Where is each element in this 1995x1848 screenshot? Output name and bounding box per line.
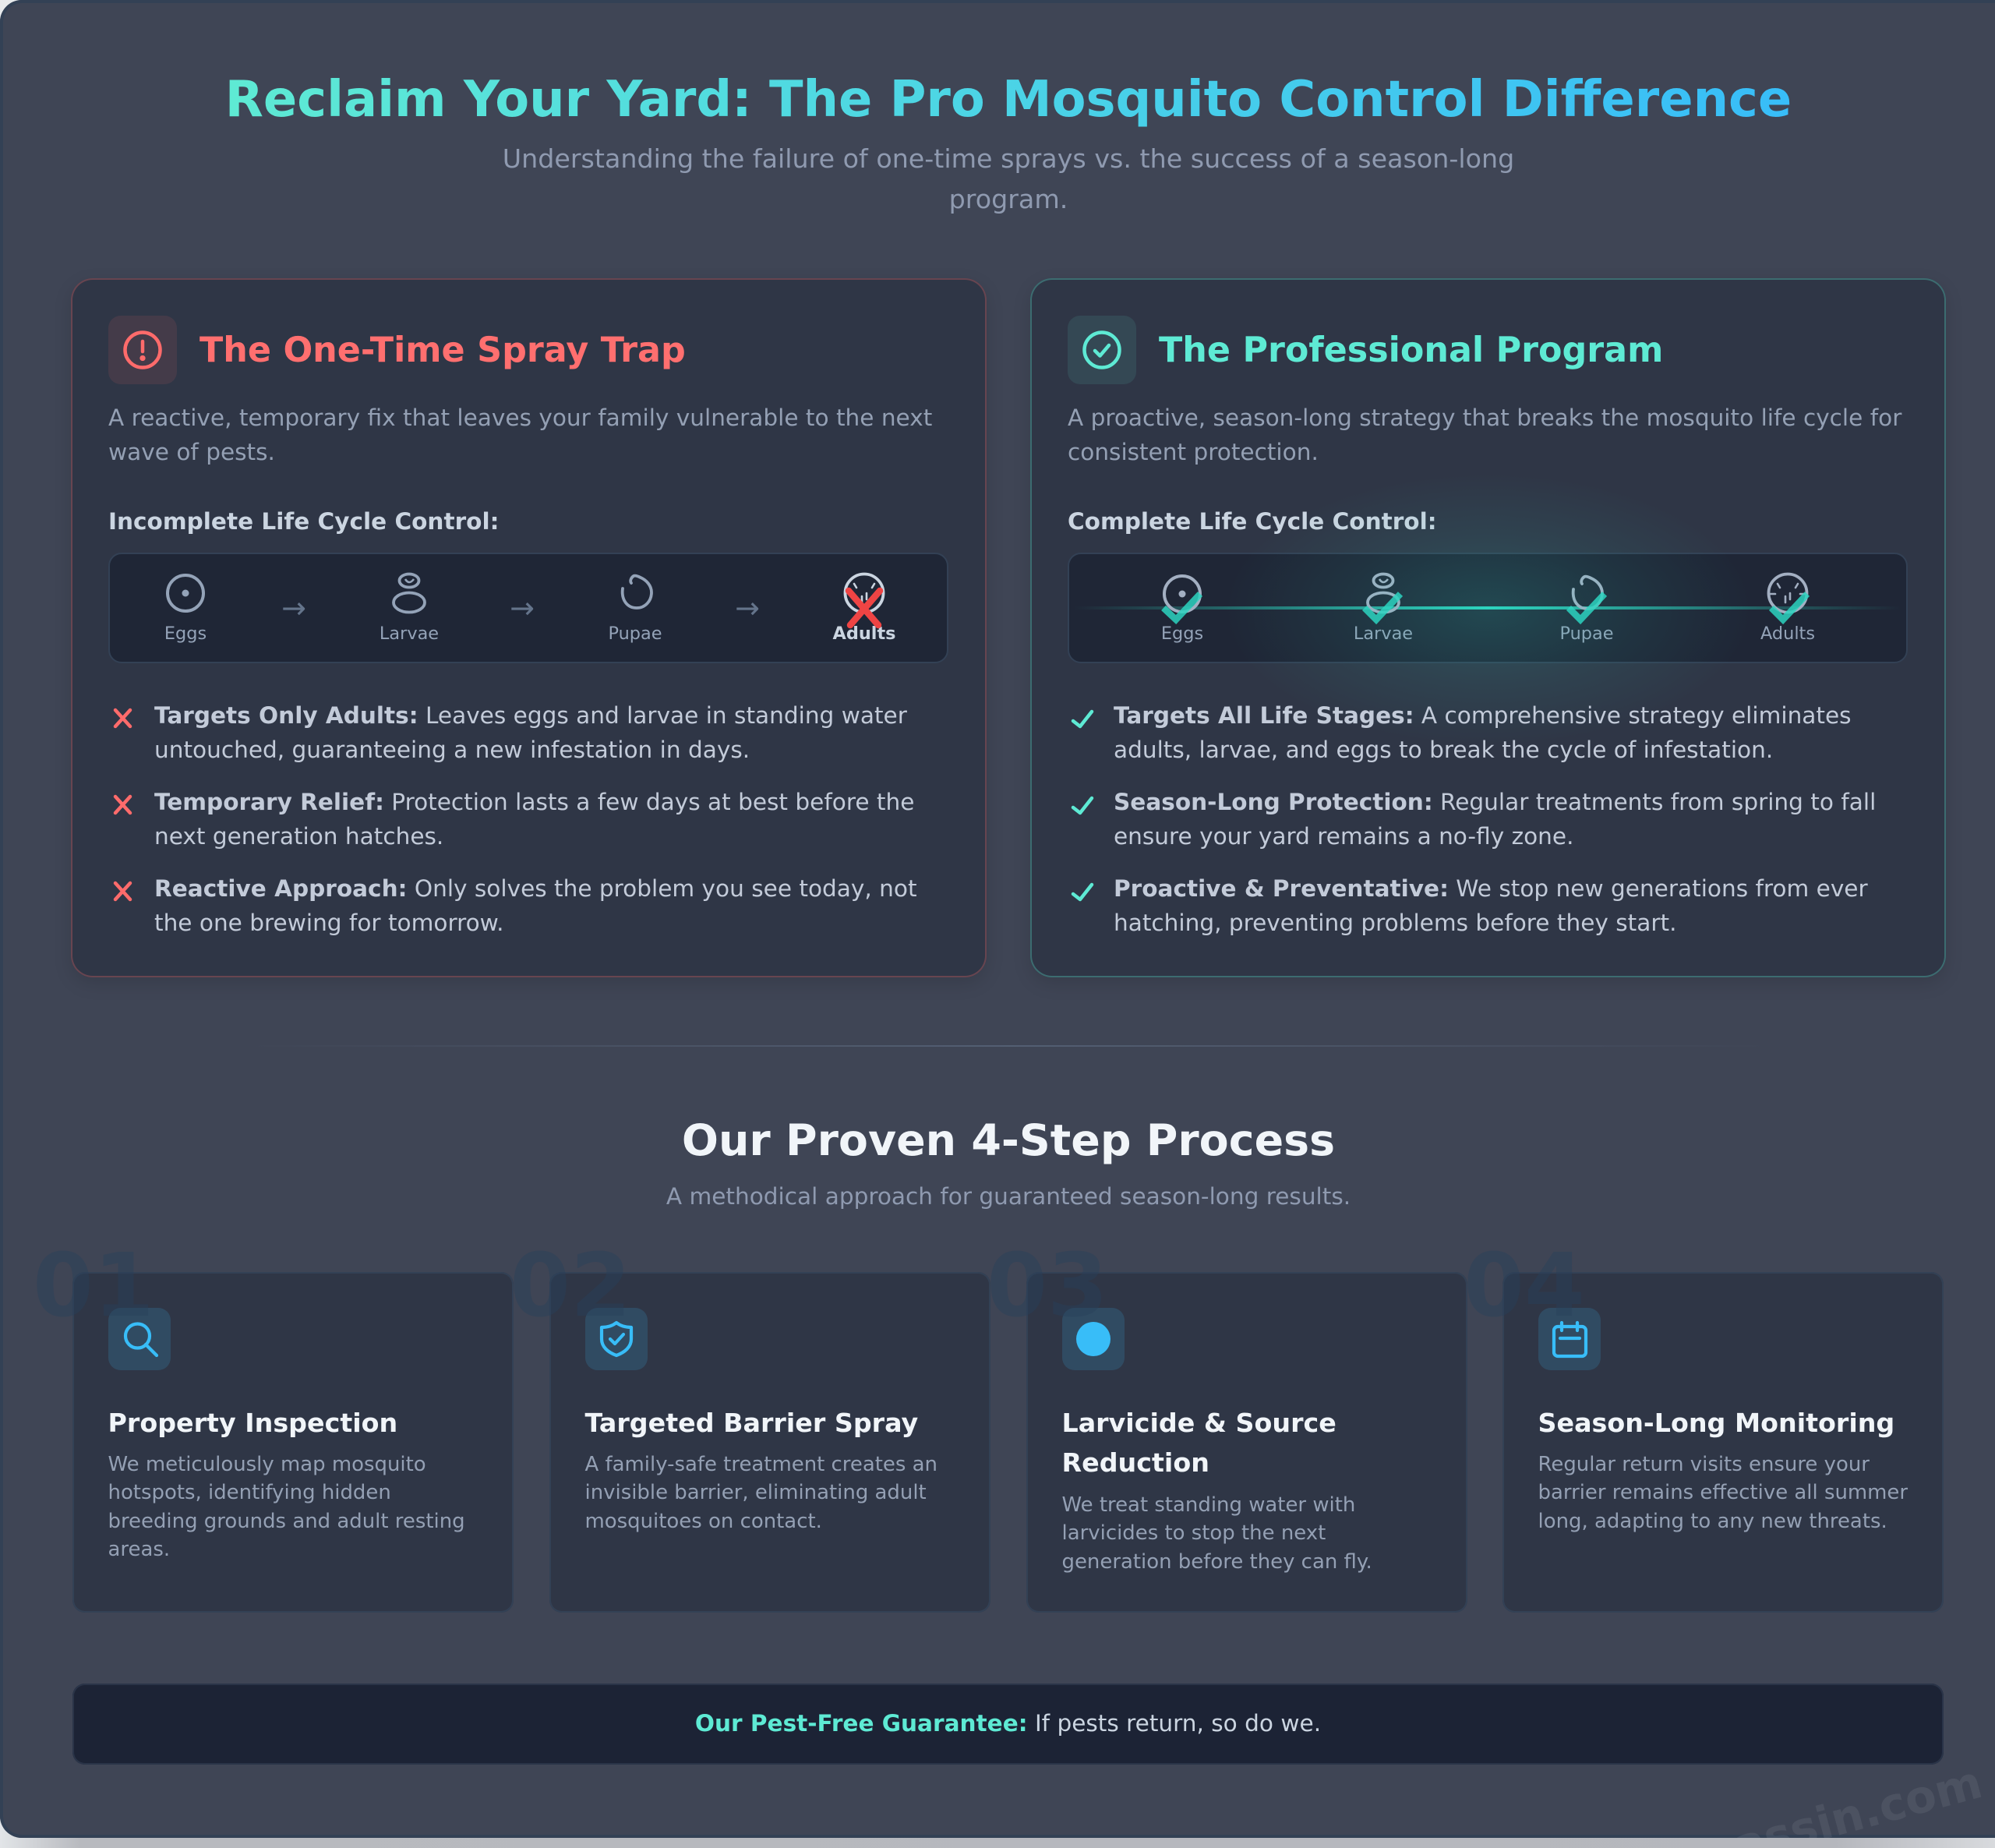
text: areas. bbox=[108, 1538, 170, 1561]
heading: one-time spray trap: The One-Time Spray Trap bbox=[200, 330, 686, 369]
card: step 2 bbox=[549, 1272, 990, 1613]
diagram: complete life cycle bbox=[1068, 553, 1908, 663]
text: description: wave of pests. bbox=[108, 439, 275, 465]
heading: Targeted Barrier Spray bbox=[584, 1408, 918, 1438]
icon: shield bbox=[585, 1308, 648, 1370]
card: step 3 bbox=[1026, 1272, 1467, 1613]
page shadow band bbox=[0, 1816, 1995, 1848]
icon: pupae checked: Pupae bbox=[1559, 624, 1614, 644]
panel: one-time spray trap bbox=[71, 278, 987, 977]
text: hotspots, identifying hidden bbox=[108, 1481, 391, 1504]
heading bbox=[1061, 1408, 1336, 1478]
icon: adults checked bbox=[1760, 574, 1815, 644]
diagram: incomplete life cycle bbox=[108, 553, 948, 663]
text: barrier remains effective all summer bbox=[1538, 1481, 1908, 1504]
list item: targets all life stages: adults, larvae, and eggs to break the cycle of infestation. bbox=[1114, 737, 1773, 763]
list item: temporary relief: next generation hatches. bbox=[154, 823, 443, 850]
list item: reactive approach: the one brewing for tomorrow. bbox=[154, 910, 504, 936]
icon: pupae checked bbox=[1559, 577, 1614, 644]
text bbox=[584, 1453, 937, 1533]
list item: targets all life stages: Targets All Life Stages: A comprehensive strategy eliminates bbox=[1114, 701, 1852, 728]
text: description: consistent protection. bbox=[1068, 439, 1319, 465]
heading: Reduction bbox=[1061, 1447, 1209, 1478]
icon: eggs: Eggs bbox=[164, 624, 207, 644]
icon: larvae checked bbox=[1354, 574, 1413, 644]
icon: magnifier bbox=[108, 1308, 171, 1370]
heading: professional program: The Professional Program bbox=[1159, 330, 1663, 369]
text: process subtitle: A methodical approach for guaranteed season-long results. bbox=[666, 1183, 1351, 1210]
icon: adults crossed out bbox=[832, 574, 896, 644]
icon: eggs checked: Eggs bbox=[1161, 624, 1203, 644]
arrow: → bbox=[281, 591, 306, 625]
list item: targets only adults bbox=[114, 701, 907, 763]
icon: larvae bbox=[380, 574, 439, 644]
list item: season-long protection: Season-Long Protection: Regular treatments from spring to fall bbox=[1114, 789, 1876, 815]
title: Reclaim Your Yard: The Pro Mosquito Control Difference bbox=[225, 70, 1792, 128]
text: invisible barrier, eliminating adult bbox=[584, 1481, 927, 1504]
text: Regular return visits ensure your bbox=[1538, 1453, 1870, 1476]
text: description: A proactive, season-long strategy that breaks the mosquito life cycle for bbox=[1068, 404, 1901, 430]
text: generation before they can fly. bbox=[1061, 1550, 1372, 1574]
icon: alert circle bbox=[108, 316, 177, 384]
text: description bbox=[1068, 404, 1901, 465]
number 04: 04 bbox=[1464, 1235, 1585, 1337]
subtitle bbox=[503, 143, 1514, 214]
text: description bbox=[108, 404, 932, 465]
heading: process: Our Proven 4-Step Process bbox=[682, 1116, 1335, 1166]
text: description: A reactive, temporary fix that leaves your family vulnerable to the next bbox=[108, 404, 932, 430]
heading: Season-Long Monitoring bbox=[1538, 1408, 1894, 1438]
list item: season-long protection bbox=[1071, 789, 1876, 850]
label: complete life cycle: Complete Life Cycle Control: bbox=[1068, 508, 1437, 535]
icon: eggs checked bbox=[1161, 576, 1203, 644]
heading: Property Inspection bbox=[108, 1408, 397, 1438]
icon: calendar bbox=[1538, 1308, 1601, 1370]
subtitle: Understanding the failure of one-time sprays vs. the success of a season-long bbox=[503, 143, 1514, 174]
subtitle: program. bbox=[949, 184, 1068, 214]
arrow: → bbox=[510, 591, 535, 625]
arrow: → bbox=[735, 591, 760, 625]
icon: pupae bbox=[608, 576, 662, 644]
text: We meticulously map mosquito bbox=[108, 1453, 426, 1476]
label: incomplete life cycle: Incomplete Life Cycle Control: bbox=[108, 508, 499, 535]
number 02: 02 bbox=[510, 1235, 631, 1337]
card: step 4 bbox=[1502, 1272, 1944, 1613]
heading: Larvicide & Source bbox=[1061, 1408, 1336, 1438]
list item: temporary relief bbox=[114, 789, 914, 850]
list item: targets only adults: Targets Only Adults: Leaves eggs and larvae in standing water bbox=[154, 701, 907, 728]
panel: professional program bbox=[1030, 278, 1946, 977]
text bbox=[1538, 1453, 1908, 1533]
icon: larvae: Larvae bbox=[380, 624, 439, 644]
icon: adults crossed out: Adults bbox=[832, 624, 896, 644]
icon: eggs bbox=[164, 575, 207, 644]
text bbox=[108, 1453, 465, 1561]
list item: reactive approach: Reactive Approach: Only solves the problem you see today, not bbox=[154, 875, 917, 901]
text: We treat standing water with bbox=[1061, 1493, 1355, 1517]
list item: targets only adults: untouched, guaranteeing a new infestation in days. bbox=[154, 737, 750, 763]
text: long, adapting to any new threats. bbox=[1538, 1510, 1887, 1533]
text: larvicides to stop the next bbox=[1061, 1521, 1326, 1545]
number 03: 03 bbox=[987, 1235, 1108, 1337]
list item: reactive approach bbox=[114, 875, 917, 936]
list item: targets all life stages bbox=[1071, 701, 1852, 763]
text: A family-safe treatment creates an bbox=[584, 1453, 937, 1476]
number 01: 01 bbox=[33, 1235, 154, 1337]
list item: temporary relief: Temporary Relief: Protection lasts a few days at best before the bbox=[154, 789, 914, 815]
guarantee bar: Our Pest-Free Guarantee: If pests return, so do we. bbox=[695, 1710, 1321, 1737]
text: mosquitoes on contact. bbox=[584, 1510, 822, 1533]
icon: check circle bbox=[1068, 316, 1136, 384]
list item: proactive and preventative: hatching, preventing problems before they start. bbox=[1114, 910, 1676, 936]
card: step 1 bbox=[72, 1272, 514, 1613]
list item: proactive and preventative bbox=[1071, 875, 1868, 936]
icon: pupae: Pupae bbox=[608, 624, 662, 644]
list item: season-long protection: ensure your yard remains a no-fly zone. bbox=[1114, 823, 1573, 850]
glow: radial highlight bbox=[1223, 473, 1753, 746]
icon: larvae checked: Larvae bbox=[1354, 624, 1413, 644]
icon: adults checked: Adults bbox=[1760, 624, 1815, 644]
icon: filled circle bbox=[1062, 1308, 1125, 1370]
text: breeding grounds and adult resting bbox=[108, 1510, 465, 1533]
line: treatment bbox=[1074, 606, 1901, 610]
list item: proactive and preventative: Proactive & Preventative: We stop new generations from ever bbox=[1114, 875, 1868, 901]
text bbox=[1061, 1493, 1372, 1574]
guarantee bar bbox=[72, 1684, 1944, 1765]
